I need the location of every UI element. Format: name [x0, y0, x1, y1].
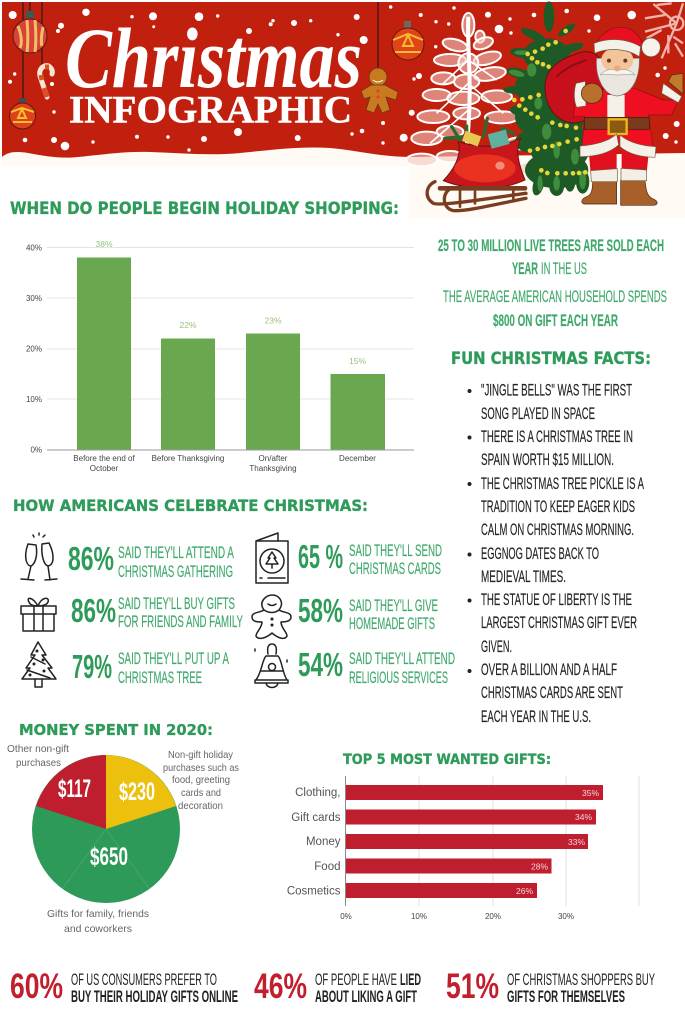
- stat: 86% attend gathering: CHRISTMAS GATHERING: [118, 563, 233, 581]
- stat: 54% religious services: [298, 646, 455, 687]
- stat: 65% send cards: 65 %: [298, 538, 343, 575]
- category labels: Food: [314, 861, 340, 873]
- facts list: SONG PLAYED IN SPACE: [481, 405, 595, 423]
- stat: 79% put up tree: 79%: [72, 648, 112, 685]
- y axis labels: 40%: [26, 244, 42, 252]
- x axis labels: December: [339, 454, 376, 463]
- x axis labels: October: [90, 464, 119, 473]
- icon: gift box: [21, 598, 56, 631]
- stat: 46% lied about a gift: 46%: [254, 967, 307, 1006]
- stat: 51% buy for themselves: 51%: [446, 967, 499, 1006]
- title script word: Christmas: [65, 10, 362, 106]
- ornaments left: [10, 2, 52, 129]
- stat: 58% homemade gifts: HOMEMADE GIFTS: [349, 615, 435, 633]
- icon: champagne glasses: [21, 533, 57, 580]
- axis labels: 30%: [558, 912, 574, 921]
- pie slice: non-gift holiday: [106, 755, 176, 829]
- pie label: other non-gift: [7, 743, 69, 769]
- bar values: 38%: [95, 239, 113, 249]
- white pine tree: [406, 13, 540, 174]
- category labels: Clothing,: [295, 787, 340, 799]
- santa hat: [596, 27, 643, 48]
- santa arms: [574, 81, 586, 107]
- pie label: gifts: [47, 908, 149, 935]
- heading: how americans celebrate christmas: HOW AMERICANS CELEBRATE CHRISTMAS:: [13, 496, 368, 515]
- stat: 86% attend gathering: [68, 540, 234, 581]
- pie values: $650: [90, 843, 128, 871]
- stat: 86% attend gathering: SAID THEY'LL ATTEND A: [118, 544, 234, 562]
- heading: when do people begin holiday shopping: WHEN DO PEOPLE BEGIN HOLIDAY SHOPPING:: [10, 199, 399, 218]
- value labels: 33%: [568, 837, 585, 847]
- value labels: 34%: [575, 812, 592, 822]
- stat: 86% buy gifts: SAID THEY'LL BUY GIFTS: [118, 595, 235, 613]
- santa coat trim: [580, 134, 656, 157]
- santa sack on back: [545, 52, 604, 123]
- pie label: non-gift holiday: decoration: [178, 800, 223, 812]
- stat: 86% buy gifts: 86%: [71, 592, 116, 629]
- pie label: other non-gift: purchases: [16, 757, 61, 769]
- pie slice: other purchases: [36, 755, 106, 829]
- santa beard and face: [596, 58, 639, 96]
- bar values: 23%: [264, 316, 282, 326]
- bar values: 22%: [179, 320, 197, 330]
- pie label: non-gift holiday: food, greeting: [172, 774, 230, 786]
- stat: 86% buy gifts: [71, 592, 243, 631]
- stat: 54% religious services: 54%: [298, 646, 343, 683]
- bar values: [95, 239, 366, 366]
- stat: 86% attend gathering: 86%: [68, 540, 114, 577]
- pie label: non-gift holiday: [163, 749, 239, 812]
- bars: [346, 785, 603, 898]
- category labels: Cosmetics: [287, 886, 341, 898]
- stat: 65% send cards: SAID THEY'LL SEND: [349, 542, 442, 560]
- stat: 54% religious services: SAID THEY'LL ATTEND: [349, 650, 455, 668]
- stat text: live trees and household spending: YEAR: [512, 260, 538, 278]
- pie label: other non-gift: Other non-gift: [7, 743, 69, 755]
- stat: 60% buy online: 60%: [10, 967, 63, 1006]
- title subtitle: INFOGRAPHIC: [69, 88, 352, 132]
- x axis labels: Before Thanksgiving: [152, 454, 224, 463]
- axis labels: [340, 912, 574, 921]
- icon: christmas tree: [22, 642, 56, 687]
- pie label: gifts: Gifts for family, friends: [47, 908, 149, 920]
- gingerbread ornament: [361, 68, 398, 113]
- stat: 79% put up tree: CHRISTMAS TREE: [118, 669, 202, 687]
- green christmas tree: [503, 1, 590, 197]
- bar values: 15%: [349, 356, 366, 366]
- stat: 65% send cards: CHRISTMAS CARDS: [349, 560, 441, 578]
- pie label: gifts: and coworkers: [64, 923, 132, 935]
- santa boots: [582, 180, 617, 204]
- santa legs: [588, 147, 649, 173]
- stat: 60% buy online: [10, 967, 238, 1006]
- x axis labels: Thanksgiving: [249, 464, 297, 473]
- value labels: 35%: [582, 788, 599, 798]
- category labels: Gift cards: [291, 812, 341, 824]
- stat text: live trees and household spending: [438, 237, 667, 330]
- category labels: Money: [306, 836, 341, 848]
- stat: 79% put up tree: [72, 648, 229, 687]
- stat: 60% buy online: OF US CONSUMERS PREFER TO: [71, 971, 217, 989]
- value labels: 26%: [516, 886, 533, 896]
- stat: 46% lied about a gift: LIED: [400, 971, 421, 989]
- sleigh: [427, 182, 526, 211]
- heading: money spent in 2020: MONEY SPENT IN 2020:: [19, 721, 213, 739]
- x axis labels: Before the end of: [73, 454, 135, 463]
- value labels: [516, 788, 599, 896]
- stat: 46% lied about a gift: OF PEOPLE HAVE: [315, 971, 397, 989]
- bars: [77, 258, 385, 450]
- y axis labels: 30%: [26, 294, 42, 303]
- banner red background: [2, 2, 685, 162]
- value labels: 28%: [531, 862, 548, 872]
- bar chart: when people begin shopping: [26, 239, 414, 473]
- category labels: [287, 787, 341, 898]
- x axis labels: On/after: [259, 454, 288, 463]
- y axis labels: 10%: [26, 395, 42, 404]
- stat: 65% send cards: [298, 538, 442, 578]
- y axis labels: 0%: [30, 446, 42, 454]
- stat text: live trees and household spending: IN THE US: [541, 260, 587, 278]
- santa belt: [584, 117, 649, 129]
- icon: bell: [255, 644, 288, 688]
- icon: christmas card: [256, 533, 288, 583]
- icon: gingerbread man: [252, 595, 291, 638]
- stat: 86% buy gifts: FOR FRIENDS AND FAMILY: [118, 613, 243, 631]
- falling snow dots: [8, 5, 680, 152]
- facts list: [468, 382, 644, 726]
- stat: 58% homemade gifts: SAID THEY'LL GIVE: [349, 597, 438, 615]
- heading: fun christmas facts: FUN CHRISTMAS FACTS:: [451, 349, 651, 368]
- stat: 58% homemade gifts: [298, 592, 438, 633]
- bar chart: most wanted gifts: [287, 776, 639, 921]
- axis labels: 10%: [411, 912, 427, 921]
- stat: 46% lied about a gift: ABOUT LIKING A GIFT: [315, 988, 417, 1006]
- facts list: GIVEN.: [481, 638, 512, 656]
- header banner: [2, 1, 685, 218]
- title: [65, 10, 362, 132]
- santa coat: [573, 88, 678, 147]
- red gift sack: [443, 138, 525, 188]
- santa illustration: [406, 1, 683, 211]
- axis labels: 0%: [340, 912, 352, 921]
- stat: 79% put up tree: SAID THEY'LL PUT UP A: [118, 650, 229, 668]
- pie label: non-gift holiday: Non-gift holiday: [168, 749, 234, 761]
- x axis labels: [73, 454, 376, 473]
- stat: 46% lied about a gift: [254, 967, 421, 1006]
- heading: top 5 most wanted gifts: TOP 5 MOST WANTED GIFTS:: [343, 752, 551, 768]
- stat: 51% buy for themselves: [446, 967, 655, 1006]
- axis labels: 20%: [485, 912, 501, 921]
- pie chart: money spent: [32, 755, 180, 903]
- snow drift: [2, 147, 685, 218]
- facts list: EGGNOG DATES BACK TO: [481, 545, 599, 563]
- y axis labels: [26, 244, 42, 454]
- snowflake: [645, 3, 683, 58]
- facts list: MEDIEVAL TIMES.: [481, 568, 566, 586]
- stat: 58% homemade gifts: 58%: [298, 592, 343, 629]
- y axis labels: 20%: [26, 344, 42, 354]
- stat: 54% religious services: RELIGIOUS SERVICES: [349, 669, 448, 687]
- pie label: non-gift holiday: cards and: [181, 787, 221, 799]
- pie label: non-gift holiday: purchases such as: [163, 762, 239, 774]
- facts list: EACH YEAR IN THE U.S.: [481, 708, 591, 726]
- pie values: $117: [58, 775, 91, 803]
- pie values: [58, 775, 155, 871]
- pie values: $230: [119, 778, 155, 806]
- stat: 60% buy online: BUY THEIR HOLIDAY GIFTS ONLINE: [71, 988, 238, 1006]
- ornaments right: [361, 2, 424, 113]
- santa cuffs: [591, 168, 647, 182]
